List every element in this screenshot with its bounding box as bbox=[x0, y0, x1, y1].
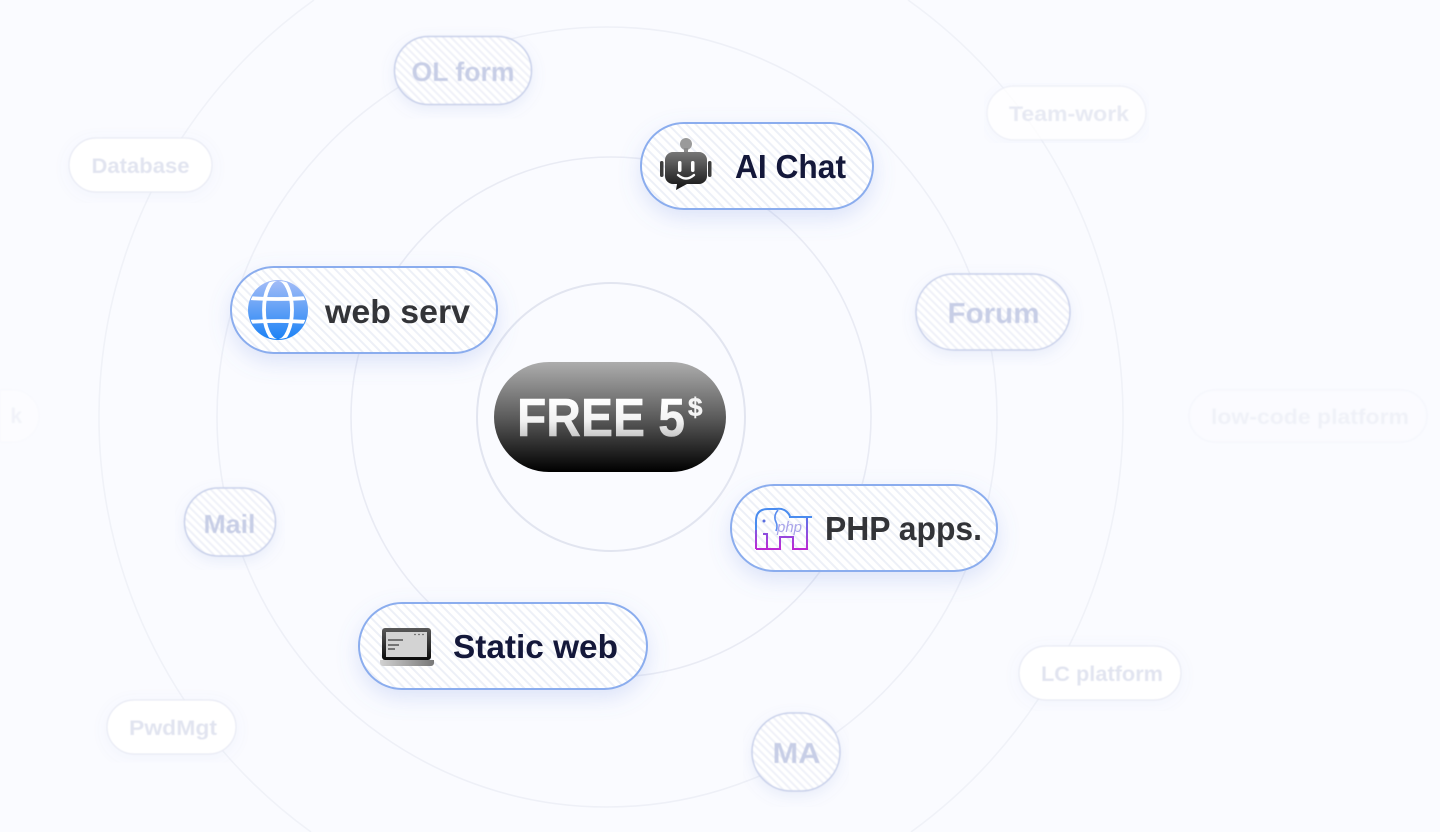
label: AI Chat: AI Chat bbox=[735, 148, 846, 185]
pill: Team-work: Team-work bbox=[1009, 103, 1129, 126]
pill: cut-off left node bbox=[0, 390, 39, 442]
pill: Forum: Forum bbox=[948, 298, 1040, 330]
pill: Mail: Mail bbox=[204, 509, 256, 539]
icon: robot bbox=[660, 138, 712, 190]
pill: PHP apps. bbox=[731, 485, 997, 571]
label: Static web: Static web bbox=[453, 628, 618, 665]
icon: php elephant bbox=[756, 509, 812, 549]
label: dollar sign: $ bbox=[688, 392, 703, 422]
pill: web serv bbox=[231, 267, 497, 353]
pill: LC platform bbox=[1019, 646, 1181, 700]
central badge: FREE 5$ bbox=[494, 362, 726, 472]
pill: PwdMgt bbox=[107, 700, 236, 754]
pill: Database bbox=[69, 138, 212, 192]
icon: php elephant: php bbox=[776, 519, 802, 536]
pill: PwdMgt: PwdMgt bbox=[129, 717, 217, 740]
label: web serv: web serv bbox=[324, 293, 471, 330]
pill: Static web bbox=[359, 603, 647, 689]
pill: OL form bbox=[394, 36, 532, 104]
pill: AI Chat bbox=[641, 123, 873, 209]
orbit rings bbox=[99, 0, 1123, 832]
pill: Mail bbox=[184, 488, 276, 556]
icon: laptop bbox=[380, 628, 434, 666]
pill: MA: MA bbox=[772, 738, 821, 770]
pill: low-code platform: low-code platform bbox=[1211, 406, 1409, 429]
pill: Team-work bbox=[987, 86, 1146, 140]
pill: MA bbox=[752, 713, 840, 791]
pill: Database: Database bbox=[92, 155, 190, 178]
pill: cut-off left node: k bbox=[10, 405, 22, 428]
label: FREE 5: FREE 5 bbox=[517, 388, 685, 448]
pill: LC platform: LC platform bbox=[1041, 663, 1163, 686]
pill: low-code platform bbox=[1189, 390, 1427, 442]
pill: OL form: OL form bbox=[412, 57, 514, 87]
label: PHP apps.: PHP apps. bbox=[825, 510, 982, 547]
icon: globe bbox=[248, 279, 308, 341]
pill: Forum bbox=[916, 274, 1070, 350]
